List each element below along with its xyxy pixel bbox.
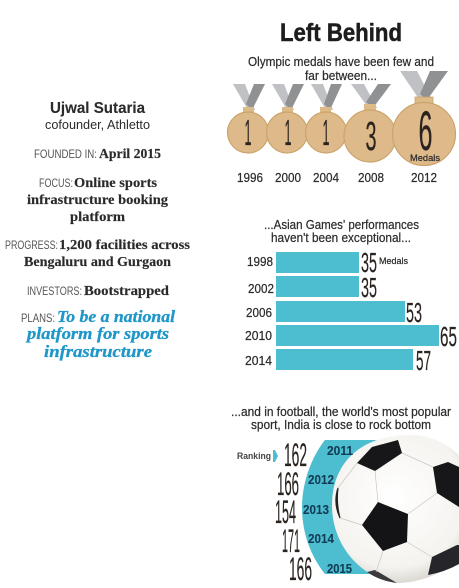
medal 1996 (228, 84, 268, 185)
panel: founder profile (5, 100, 191, 361)
plans (21, 307, 175, 361)
founded in: FOUNDED IN: (34, 147, 97, 161)
investors: INVESTORS: (27, 284, 82, 298)
founded in: April 2015 (99, 147, 161, 162)
founder name: Ujwal Sutaria (50, 100, 145, 117)
medal 2012 (392, 71, 456, 185)
Olympic heading: far between... (305, 68, 377, 83)
plans: PLANS: (21, 311, 55, 325)
medal 1996: 1 (244, 112, 252, 153)
plans: platform for sports (25, 324, 169, 343)
Asian Games heading (264, 217, 419, 245)
bar 1998: Medals (379, 256, 408, 266)
medal 2012: Medals (410, 153, 440, 164)
progress (5, 238, 191, 270)
bar 1998 (247, 247, 408, 278)
rank 2014: 171 (282, 523, 300, 559)
medal 2000: 2000 (275, 171, 301, 185)
plans: infrastructure (44, 342, 152, 361)
focus: FOCUS: (39, 176, 73, 190)
Asian Games heading: haven't been exceptional... (271, 230, 411, 245)
bar 2010 (245, 321, 457, 352)
rank 2011: 2011 (327, 444, 353, 458)
investors: Bootstrapped (84, 284, 169, 299)
Olympic heading: Olympic medals have been few and (248, 54, 434, 69)
focus: infrastructure booking (27, 193, 168, 208)
bar 2002: 35 (361, 272, 377, 303)
medal 2012: 6 (418, 99, 432, 162)
rank 2013: 2013 (303, 503, 329, 517)
bar 2002 (248, 272, 377, 303)
teal year crescent (302, 440, 385, 574)
bar 2002: 2002 (248, 282, 274, 296)
focus (27, 176, 168, 225)
rank 2012: 2012 (308, 473, 334, 487)
panel: Asian Games bar chart: 57 (416, 345, 431, 376)
football heading (231, 404, 452, 432)
rank 2014: 2014 (308, 532, 334, 546)
investors (27, 284, 169, 299)
rank 2015: 166 (289, 551, 312, 587)
medal 1996: 1996 (237, 171, 263, 185)
panel: Olympic medals (228, 54, 456, 185)
founder role: cofounder, Athletto (45, 118, 150, 132)
plans: To be a national (57, 307, 175, 326)
rank 2011: 162 (284, 437, 307, 473)
medal 2004: 2004 (313, 171, 339, 185)
medal 2000 (266, 84, 308, 185)
bar 1998: 1998 (247, 255, 273, 269)
ranking label: Ranking (237, 451, 271, 462)
medal 2004: 1 (322, 112, 330, 153)
bar 2006: 2006 (246, 306, 272, 320)
medal 2008: 2008 (358, 171, 384, 185)
progress: Bengaluru and Gurgaon (24, 255, 171, 270)
focus: Online sports (74, 176, 158, 191)
medal 2008 (344, 84, 396, 185)
panel: football rankings (231, 404, 459, 587)
rank 2015: 2015 (327, 562, 352, 576)
bar 1998: 35 (361, 247, 377, 278)
Olympic heading (248, 54, 434, 83)
medal 2000: 1 (284, 112, 292, 153)
rank 2012: 166 (277, 466, 299, 502)
progress: PROGRESS: (5, 238, 58, 252)
medal 2012: 2012 (411, 171, 437, 185)
panel: Asian Games bar chart (245, 217, 457, 376)
icon: ranking arrow (273, 450, 278, 462)
football heading: sport, India is close to rock bottom (251, 417, 431, 432)
icon: football (332, 435, 459, 583)
title: Left Behind (280, 19, 402, 47)
Asian Games heading: ...Asian Games' performances (264, 217, 419, 232)
medal 2008: 3 (366, 113, 376, 159)
bar 2006: 53 (406, 297, 422, 328)
bar 2010: 2010 (245, 329, 272, 343)
bar 2014: 2014 (245, 354, 272, 368)
focus: platform (70, 210, 125, 225)
founded in (34, 147, 161, 162)
bar 2014 (245, 345, 431, 376)
medal 2004 (306, 84, 346, 185)
bar 2006 (246, 297, 422, 328)
progress: 1,200 facilities across (59, 238, 191, 253)
rank 2013: 154 (275, 494, 296, 530)
